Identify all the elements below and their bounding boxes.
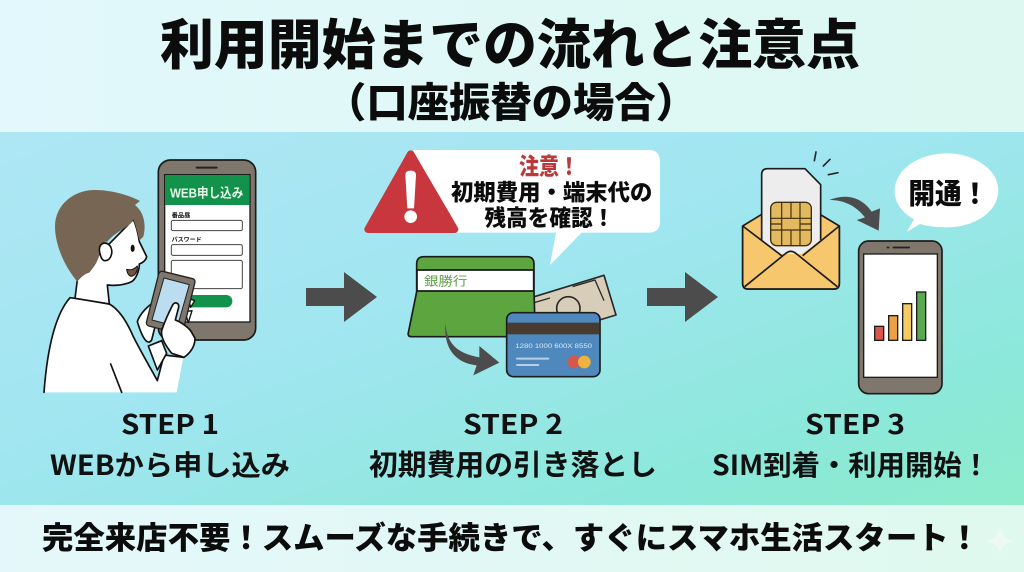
footer message: 完全来店不要！スムーズな手続きで、すぐにスマホ生活スタート！ (42, 513, 980, 558)
background panel (0, 132, 1024, 505)
icon: large phone with web form: WEB申し込み (170, 185, 243, 200)
icon: credit card (507, 313, 600, 377)
icon: spark lines (814, 152, 838, 175)
icon: large phone with web form: 番品昼 (172, 211, 190, 219)
icon: money (521, 275, 616, 340)
callout text: 初期費用・端末代の (451, 174, 652, 207)
arrow: bank to card (445, 323, 499, 375)
title: 利用開始までの流れと注意点 (160, 1, 860, 80)
icon: person (44, 190, 195, 392)
callout text: 残高を確認！ (484, 200, 614, 233)
icon: handheld phone (146, 271, 195, 357)
step 1 label: WEBから申し込み (50, 444, 290, 484)
subtitle: （口座振替の場合） (325, 69, 697, 129)
footer band (0, 505, 1024, 572)
step 3 label: SIM到着・利用開始！ (712, 444, 990, 484)
speech bubble: open: 開通！ (908, 171, 988, 212)
step 1 illustration: person with phone (44, 160, 256, 392)
icon: bankbook (408, 257, 535, 337)
callout text: 注意！ (519, 147, 579, 181)
step 1 label: STEP 1 (121, 403, 219, 442)
icon: SIM card (762, 169, 821, 255)
speech bubble (413, 147, 660, 265)
step 3 label: STEP 3 (805, 403, 905, 442)
icon: warning triangle (368, 154, 455, 229)
step 1 label (50, 403, 290, 484)
icon: envelope flap (743, 226, 839, 287)
step 2 label: 初期費用の引き落とし (369, 442, 657, 484)
arrow: step 2 to 3 (647, 272, 718, 322)
icon: envelope back (743, 197, 839, 289)
icon: large phone with web form: パスワード (172, 236, 202, 243)
icon: envelope pocket (743, 226, 839, 289)
step 2 label: STEP 2 (463, 403, 563, 442)
speech bubble: open (895, 153, 998, 232)
icon: credit card: 1280 1000 600X 8550 (515, 344, 593, 350)
step 2 illustration (368, 147, 660, 377)
arrow: step 1 to 2 (306, 272, 377, 322)
icon: phone with signal bars (859, 241, 942, 394)
step 3 label (712, 403, 990, 484)
header band (0, 0, 1024, 132)
bar chart: signal (875, 292, 926, 340)
icon: bankbook: 銀勝行 (424, 275, 468, 289)
icon: envelope outline (743, 226, 839, 289)
step 3 illustration (743, 152, 998, 394)
step 2 label (369, 403, 657, 484)
icon: large phone with web form (158, 160, 256, 340)
arrow: SIM to phone (829, 197, 880, 231)
icon: sparkle (986, 527, 1014, 555)
callout text (451, 147, 652, 233)
